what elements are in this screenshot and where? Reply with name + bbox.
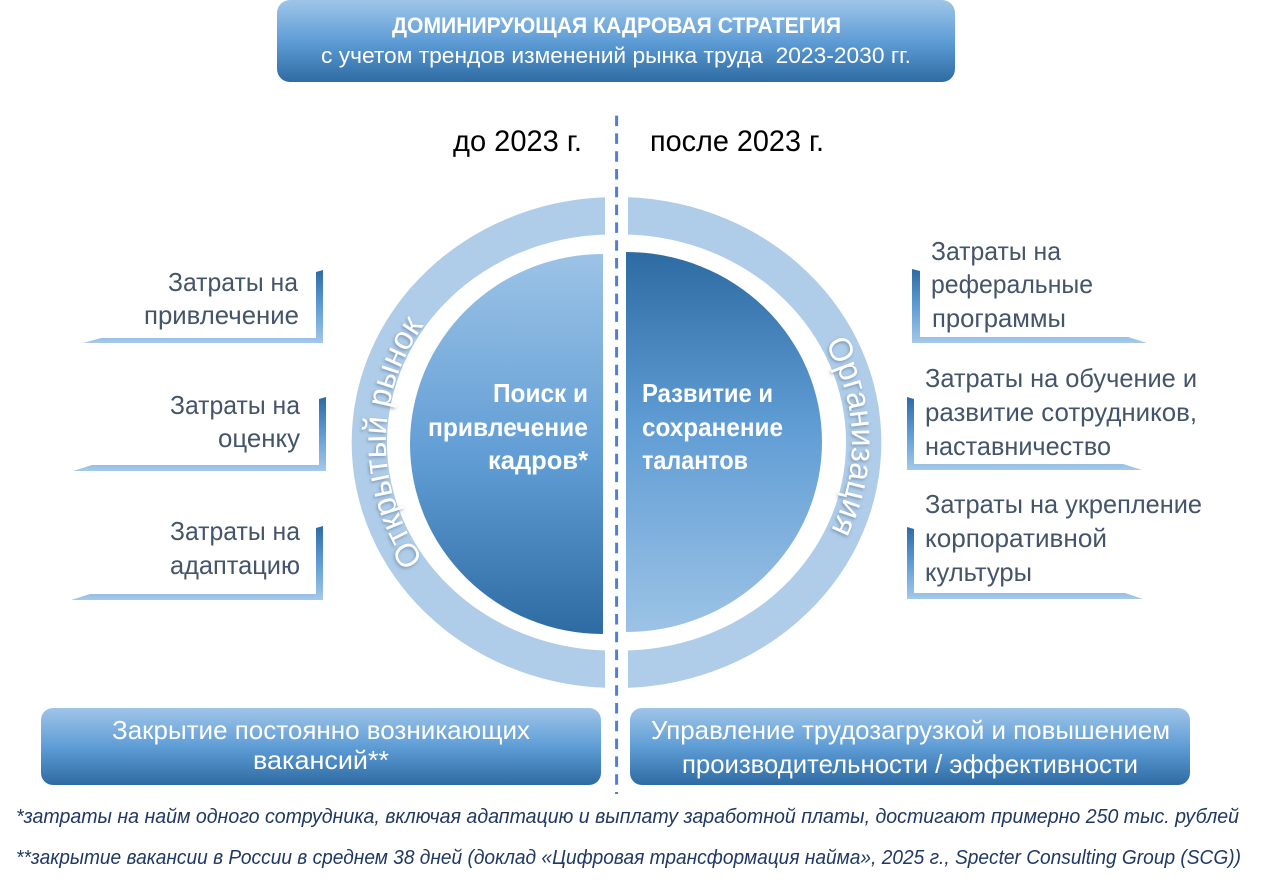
left outer ring: open market [352, 197, 605, 688]
bottom box: closing vacancies: Закрытие постоянно возникающих [112, 715, 530, 745]
disc text: development and retention: Развитие и [642, 378, 773, 408]
title subheading: с учетом трендов изменений рынка труда 2023-2030 гг. [321, 43, 911, 68]
ring label: open market: Открытый рынок [360, 316, 424, 570]
period label: after 2023: после 2023 г. [650, 125, 824, 158]
left callout: onboarding costs: адаптацию [170, 550, 300, 580]
bottom box: workload management: производительности / эффективности [682, 749, 1138, 779]
right callout: referral programme costs: программы [932, 303, 1066, 333]
right callout: referral programme costs: реферальные [931, 269, 1093, 299]
right callout: referral programme costs [912, 236, 1147, 343]
bottom box: workload management [630, 708, 1190, 785]
period label: before 2023: до 2023 г. [453, 125, 582, 158]
left callout: attraction costs: привлечение [144, 300, 299, 330]
right callout: training costs [907, 363, 1197, 470]
left callout: assessment costs [73, 390, 326, 471]
left callout: attraction costs: Затраты на [168, 267, 299, 297]
disc text: search and hiring [428, 378, 589, 475]
disc text: search and hiring: Поиск и [493, 378, 588, 408]
disc text: development and retention [642, 378, 783, 475]
title heading: ДОМИНИРУЮЩАЯ КАДРОВАЯ СТРАТЕГИЯ [392, 13, 841, 38]
left callout: onboarding costs: Затраты на [170, 516, 301, 546]
left callout: assessment costs: оценку [218, 423, 300, 453]
left callout: attraction costs [83, 267, 323, 343]
bottom box: closing vacancies: вакансий** [253, 745, 389, 775]
left half disc: search and hiring [410, 254, 603, 634]
right callout: training costs: развитие сотрудников, [925, 397, 1197, 427]
right callout: corporate culture costs: Затраты на укрепление [925, 489, 1202, 519]
right outer ring: organisation [628, 197, 882, 688]
right callout: training costs: наставничество [925, 431, 1111, 461]
disc text: development and retention: сохранение [642, 412, 783, 442]
footnote: hiring cost: *затраты на найм одного сотрудника, включая адаптацию и выплату заработной платы, достигают примерно 250 тыс. рублей [16, 806, 1239, 828]
disc text: development and retention: талантов [642, 445, 748, 475]
footnote: vacancy closing time: **закрытие вакансии в России в среднем 38 дней (доклад «Цифровая трансформация найма», 2025 г., Specter Consulting Group (SCG)) [16, 847, 1241, 869]
left callout: onboarding costs [71, 516, 323, 600]
right callout: referral programme costs: Затраты на [931, 236, 1062, 266]
ring label: organisation: Организация [826, 338, 870, 538]
disc text: search and hiring: кадров* [488, 445, 589, 475]
left callout: assessment costs: Затраты на [170, 390, 301, 420]
bottom box: workload management: Управление трудозагрузкой и повышением [651, 715, 1170, 745]
right callout: training costs: Затраты на обучение и [925, 363, 1197, 393]
dashed divider [615, 115, 618, 794]
disc text: search and hiring: привлечение [428, 412, 588, 442]
right half disc: development and retention [626, 252, 822, 632]
right callout: corporate culture costs [907, 489, 1202, 599]
bottom box: closing vacancies [41, 708, 601, 785]
title banner [277, 0, 955, 82]
right callout: corporate culture costs: культуры [925, 557, 1032, 587]
right callout: corporate culture costs: корпоративной [925, 523, 1107, 553]
